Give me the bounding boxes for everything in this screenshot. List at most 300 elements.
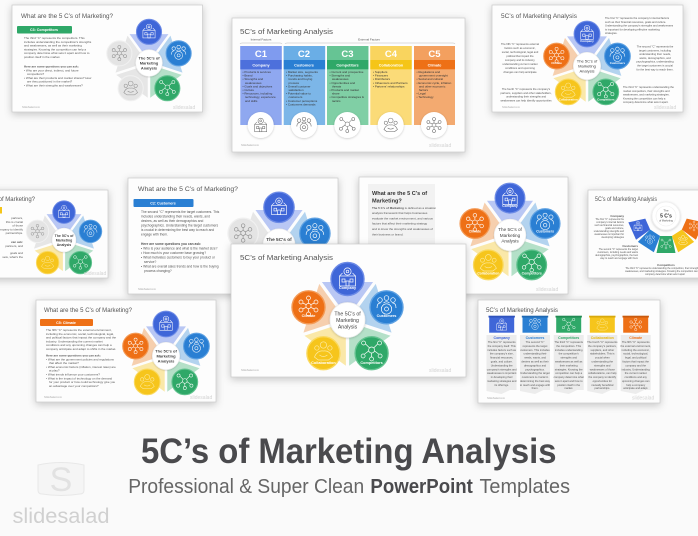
column: collaboration: suppliers, and other <box>590 348 614 352</box>
factor labels <box>240 38 455 44</box>
text: climate: social, technological, legal and <box>502 50 539 54</box>
body text: Here are some questions you can ask: <box>141 242 201 246</box>
text: climate: understanding current market <box>502 62 538 66</box>
column: customers: to reach and engage with <box>520 383 551 387</box>
body text: • What economic factors (inflation, interest rates) are <box>46 365 116 369</box>
text: climate: conditions and upcoming <box>505 66 535 70</box>
text: customers: Customers <box>622 244 638 248</box>
column: customers: demographics and <box>524 363 547 367</box>
body text: • What are their strengths and weaknesses? <box>24 84 83 88</box>
body text: • What are their products and market shares? How <box>24 76 92 80</box>
body text: of those <box>12 224 23 228</box>
text: company: developing strategies <box>601 236 625 239</box>
intro text: factors that affect their marketing strategy <box>372 222 428 226</box>
pentagon diagram <box>107 19 191 101</box>
slide: 5C columns, top centre <box>232 18 465 152</box>
body text: for your product or how could technology give you <box>49 380 116 384</box>
pentagon diagram <box>26 201 102 274</box>
column: competitors: company determine what <box>554 375 584 379</box>
column: climate: Climate <box>629 336 642 340</box>
intro text: and to know the strengths and weaknesses of <box>372 227 433 231</box>
column: collaboration: the company to identify <box>588 375 617 379</box>
slide heading: What are the 5 C’s of Marketing? <box>21 14 114 20</box>
callout: C5 climate: C5: Climate <box>56 321 76 325</box>
footer: slidesalad <box>173 105 195 111</box>
text: company: weaknesses is important for <box>594 233 624 236</box>
footer: SlideSalad.com <box>487 396 505 400</box>
column: collaboration <box>587 316 618 394</box>
column C1 company: • Goals and objectives <box>242 84 273 88</box>
pentagon diagram: Marketing <box>156 354 176 359</box>
slide: competitors focus, top left <box>12 5 202 112</box>
text: climate: factors such as economic, <box>504 46 536 50</box>
column: climate: conditions and any <box>624 375 648 379</box>
column: company: the company's size, <box>490 352 514 356</box>
intro heading: What are the 5 C's of <box>372 191 427 197</box>
column C3 competitors: share <box>332 92 340 96</box>
column: climate <box>621 316 651 394</box>
centre label: The 5C's of <box>334 312 361 318</box>
column: customers: Customers <box>526 336 544 340</box>
fan segments <box>628 215 698 253</box>
body text: • What is the impact of technology on the demand <box>46 376 112 380</box>
slide heading: 5C’s of Marketing Analysis <box>486 308 558 314</box>
column: climate: company and the <box>625 363 647 367</box>
body text: industry. Understanding the current market <box>46 339 103 343</box>
column C1 company: • Brand <box>242 74 253 78</box>
column: competitors: the competitors. This <box>556 344 582 348</box>
footer: slidesalad <box>536 287 558 293</box>
callout: C3 competitors: C3: Competitors <box>30 28 58 32</box>
slide: definition and pentagon <box>359 177 568 294</box>
slide: collaboration focus, left edge <box>0 190 108 278</box>
text: competitors <box>625 263 698 276</box>
column: customers: Understanding the target <box>520 371 550 375</box>
column: competitors: Competitors <box>558 336 579 340</box>
body text: service? <box>144 260 156 264</box>
pentagon diagram: Analysis <box>579 69 595 74</box>
column C4 collaboration: • Influencers and Partners <box>373 81 408 85</box>
column: collaboration: The fourth "C" represents <box>587 340 618 344</box>
text: customers: way to reach and engage with them <box>600 257 638 260</box>
grey intro panel <box>368 184 435 244</box>
centre label: Analysis <box>338 324 358 330</box>
footer <box>241 368 451 374</box>
text: customers: for the best way to reach them. <box>637 67 674 71</box>
column: company: Understanding the <box>491 363 513 367</box>
column: climate: industry. Understanding <box>622 367 650 371</box>
column C4 collaboration <box>370 46 412 138</box>
footer <box>241 143 451 149</box>
body text: • Who are your direct, indirect, and future <box>24 68 79 72</box>
column C4 collaboration: C4 <box>385 49 398 60</box>
text: competitors: weaknesses, and marketing strategies. <box>623 93 670 97</box>
intro heading: Marketing? <box>372 198 402 204</box>
column C1 company: C1 <box>255 49 268 60</box>
node labels: Customers <box>377 314 396 318</box>
column: company: the company itself. This <box>488 344 516 348</box>
column: competitors <box>554 316 584 394</box>
text: climate: political that impact the <box>506 54 534 58</box>
column: customers: them. <box>532 386 539 390</box>
column C1 company: weaknesses <box>245 81 262 85</box>
column: competitors: strengths and <box>561 356 577 360</box>
column: competitors: competition can help a <box>555 371 583 375</box>
column C5 climate: • Social and cultural <box>416 77 443 81</box>
column: climate: anticipate and adapt. <box>623 386 648 390</box>
pentagon diagram: Collaboration <box>477 272 499 276</box>
footer: slidesalad <box>429 368 451 374</box>
text: customers: wants, demographics, and <box>639 56 671 60</box>
intro text: their business or brand. <box>372 232 404 236</box>
slide: fan diagram, right edge <box>588 190 698 278</box>
body text: and political factors that impact the company and the <box>46 336 116 340</box>
centre badge: of Marketing <box>659 220 673 222</box>
pentagon diagram: Marketing <box>500 233 521 238</box>
slide heading: What are the 5 C’s of Marketing? <box>44 308 133 314</box>
slide: five ribbon columns, lower right <box>478 300 660 403</box>
text: collaboration: understanding their strengths and <box>506 95 547 99</box>
column C2 customers: process <box>288 81 300 85</box>
column: climate: factors that impact the <box>622 360 649 364</box>
column C2 customers: satisfaction <box>288 88 304 92</box>
column: collaboration: understanding the <box>592 360 614 364</box>
pentagon diagram <box>228 192 330 287</box>
slide heading: 5C’s of Marketing Analysis <box>240 253 333 262</box>
text: competitors: Competitors <box>657 263 675 267</box>
footer: SlideSalad.com <box>44 395 62 399</box>
text: collaboration: The fourth "C" represents the company's <box>502 87 551 91</box>
column: climate: social, technological, <box>623 352 648 356</box>
text: climate: changes can help anticipate <box>503 70 537 74</box>
column: customers: needs, wants, and <box>524 356 546 360</box>
footer: slidesalad <box>190 395 212 401</box>
body text: company determine what sets it apart and how to <box>24 51 90 55</box>
slide heading: What are the 5 C’s of Marketing? <box>138 187 239 193</box>
column C1 company: • Products & services <box>242 70 271 74</box>
body text: engage with them. <box>141 232 168 236</box>
text: competitors: company determine what sets it apart. <box>623 100 669 104</box>
pentagon diagram: Company <box>580 39 594 43</box>
column: customers: determining the best way <box>520 379 551 383</box>
subtitle: Professional & Super Clean <box>128 476 364 498</box>
column: company: financial resources, <box>490 356 514 360</box>
text: customers: target customers, including <box>639 48 672 52</box>
subtitle: PowerPoint <box>370 476 473 498</box>
column C4 collaboration: Collaboration <box>379 63 404 67</box>
column: climate: legal, and political <box>625 356 647 360</box>
text: customers: The second "C" represents the target <box>599 248 638 251</box>
column C1 company: technology, experience <box>245 95 276 99</box>
text: customers: The second "C" represents the <box>637 44 674 48</box>
body text: and weaknesses, as well as their marketing <box>24 44 82 48</box>
footer: slidesalad <box>632 396 654 402</box>
body text: are they positioned in the market? <box>27 80 73 84</box>
body text: conditions and any upcoming changes can help a <box>46 343 112 347</box>
text: company: is important for developing effective marketing <box>605 27 660 31</box>
column C5 climate: government oversight <box>419 74 448 78</box>
column C3 competitors: • Competitive strategies & <box>330 95 364 99</box>
column C1 company: • Resources, including <box>242 92 273 96</box>
column: customers: psychographics. <box>525 367 545 371</box>
body text: Here are some questions you can ask: <box>24 64 79 68</box>
column C3 competitors <box>327 46 368 138</box>
text: company: Company <box>610 214 624 218</box>
column: customers: customers is crucial in <box>522 375 549 379</box>
column C2 customers: • Overall customer <box>286 84 311 88</box>
pentagon diagram: Marketing <box>140 61 159 66</box>
body text: The fifth "C" represents the external environment, <box>46 328 112 332</box>
callout: C5 climate <box>40 319 93 326</box>
footer: SlideSalad.com <box>241 368 259 372</box>
slide: climate focus, lower left <box>36 300 216 402</box>
text: company: Understanding the company's strengths and weaknesses <box>605 24 674 28</box>
centre badge: The <box>663 208 669 212</box>
main title: 5C’s of Marketing Analysis <box>141 432 556 471</box>
slidesalad logo: slidesalad <box>12 505 110 528</box>
pentagon diagram: Collaboration <box>559 97 578 101</box>
body text: strategies. Knowing the competition can help a <box>24 47 86 51</box>
node labels: Competitors <box>360 361 383 365</box>
body text: includes understanding the competition's strengths <box>24 40 92 44</box>
node labels: Climate <box>302 314 315 318</box>
column C5 climate: factors <box>419 88 429 92</box>
footer: SlideSalad.com <box>241 143 259 147</box>
column C4 collaboration: • Partners' relationships <box>373 84 405 88</box>
body text: • What trends influence your customers? <box>46 372 100 376</box>
intro text: evaluate the market environment, and various <box>372 216 433 220</box>
pentagon diagram <box>292 262 403 370</box>
column C3 competitors: • Opportunities and <box>330 81 355 85</box>
footer: slidesalad <box>429 143 451 149</box>
slide heading: 5C’s of Marketing Analysis <box>501 14 577 20</box>
text: customers <box>595 244 639 260</box>
column C3 competitors: Competitors <box>336 63 359 67</box>
slide heading: 5C’s of Marketing Analysis <box>240 27 333 36</box>
column: climate: upcoming changes can <box>622 379 650 383</box>
pentagon diagram: Analysis <box>269 249 289 255</box>
column C3 competitors: threats <box>332 84 342 88</box>
text: customers: psychographics, understanding <box>636 60 674 64</box>
column C2 customers <box>284 46 325 138</box>
column: collaboration: Collaboration <box>591 336 614 340</box>
body text: company anticipate and adapt to shifts in the market. <box>46 347 116 351</box>
column C1 company: • Culture <box>242 88 254 92</box>
body text: position itself in the market. <box>24 55 61 59</box>
subtitle <box>128 476 570 498</box>
column C1 company <box>240 46 282 138</box>
text: climate: The fifth "C" represents external <box>501 42 539 46</box>
centre badge <box>652 202 680 230</box>
column C1 company: Company <box>252 63 271 67</box>
column: collaboration: strengths and <box>594 363 611 367</box>
text: competitors: company determine what sets it apart <box>645 273 685 276</box>
column: company: goals, and culture. <box>491 360 513 364</box>
body text: partners, <box>11 216 23 220</box>
text: company <box>594 214 625 239</box>
column C4 collaboration: • Distributors <box>373 77 391 81</box>
column C2 customers: trends and buying <box>288 77 313 81</box>
column: collaboration: stakeholders. This is <box>590 352 615 356</box>
body text: psychographics. Understanding the target customers <box>141 224 219 228</box>
text: customers: demographics, psychographics, the best <box>595 254 638 257</box>
column C3 competitors: • Products and market <box>330 88 359 92</box>
body text: The third "C" represents the competitors. This <box>24 36 85 40</box>
pentagon diagram: Competitors <box>597 97 615 101</box>
pentagon diagram: The 5C's of <box>55 234 74 238</box>
slidesalad logo <box>12 461 110 528</box>
body text: goals and <box>10 251 23 255</box>
body text: is crucial in determining the best way to reach and <box>141 228 214 232</box>
intro text: The 5 C's of Marketing is defined as a situation <box>372 206 436 210</box>
subtitle: Templates <box>480 476 570 498</box>
column: collaboration: weaknesses of those <box>590 367 615 371</box>
text: customers: customers, including needs and wants <box>597 251 639 254</box>
pentagon diagram: Analysis <box>57 243 71 247</box>
footer: slidesalad <box>654 105 676 111</box>
column C2 customers: Customers <box>294 63 314 67</box>
slide: main pentagon, front centre <box>231 244 466 377</box>
column C5 climate <box>414 46 455 138</box>
pentagon diagram: Marketing <box>56 238 72 242</box>
pentagon diagram: The 5C's of <box>155 348 177 353</box>
column C5 climate: and other economic <box>419 84 446 88</box>
column: company: includes factors such as <box>487 348 517 352</box>
pentagon diagram: Competitors <box>522 272 542 276</box>
column: competitors: the competition's <box>559 352 579 356</box>
pentagon diagram: Marketing <box>578 64 596 69</box>
factor labels: Internal Factors <box>251 38 272 42</box>
text: company: goals and culture, <box>605 227 624 230</box>
text: company: such as financial resources, <box>594 224 624 227</box>
pentagon diagram: Analysis <box>141 65 158 70</box>
pentagon diagram: The 5C's of <box>138 56 160 61</box>
column C2 customers: • Customer perceptions <box>286 99 318 103</box>
column C4 collaboration: • Suppliers <box>373 70 388 74</box>
node labels <box>302 286 396 365</box>
column: climate: help a company <box>626 383 646 387</box>
pentagon diagram: Analysis <box>501 239 519 244</box>
column: collaboration: partnerships. <box>595 386 610 390</box>
pentagon diagram: Company <box>502 204 518 208</box>
column: company <box>486 316 517 394</box>
text: competitors: Knowing the competition can help a <box>623 96 666 100</box>
column: climate: the current market <box>625 371 647 375</box>
column C3 competitors: • Strengths and <box>330 74 350 78</box>
column: customers <box>520 316 551 394</box>
column C3 competitors: C3 <box>341 49 354 60</box>
column C4 collaboration: • Financers <box>373 74 389 78</box>
column C2 customers: • Potential value to <box>286 92 311 96</box>
column: customers: understanding their <box>523 352 547 356</box>
column C2 customers: • Market size, segments <box>286 70 318 74</box>
pentagon diagram: Customers <box>610 61 625 65</box>
column: company: in developing their <box>491 375 513 379</box>
centre label <box>334 312 361 330</box>
column C5 climate: Climate <box>428 63 441 67</box>
column C5 climate: C5 <box>428 49 441 60</box>
column: climate: the external environment, <box>621 344 651 348</box>
body text: sets, what's the <box>2 255 23 259</box>
body text: desires, as well as their demographics and <box>141 219 203 223</box>
body text: an advantage over your competitors? <box>49 384 99 388</box>
text: collaboration: weaknesses can help identify opportunities <box>500 98 552 102</box>
centre badge: 5 C's <box>660 214 672 220</box>
pentagon diagram <box>544 21 630 105</box>
text: customers: understanding their needs, <box>639 52 671 56</box>
footer: slidesalad <box>84 271 106 277</box>
body text: including the economic, social, technological, legal, <box>46 332 114 336</box>
text: climate: company and its industry, <box>505 58 535 62</box>
column: competitors: their marketing <box>560 363 578 367</box>
callout: C2 customers: C2: Customers <box>150 201 176 205</box>
column: competitors: The third "C" represents <box>554 340 584 344</box>
footer: SlideSalad.com <box>22 105 40 109</box>
column: collaboration: the company's partners, <box>588 344 617 348</box>
column: climate: The fifth "C" represents <box>622 340 650 344</box>
column C5 climate: • Technology <box>416 95 434 99</box>
callout: C2 customers <box>134 199 194 207</box>
column: collaboration: collaborations, can help <box>588 371 617 375</box>
body text: this is crucial <box>6 220 23 224</box>
body text: Here are some questions you can ask: <box>46 354 101 358</box>
footer <box>502 105 676 111</box>
text: company: The first "C" represents the company's internal factors <box>605 16 670 20</box>
column: company: company's strengths and <box>487 367 517 371</box>
body text: can ask: <box>11 240 23 244</box>
footer <box>487 396 654 402</box>
column C5 climate: • Economic cycle, inflation <box>416 81 452 85</box>
body text: • What are overall sales trends and how is the buying <box>141 264 219 268</box>
pentagon diagram: The 5C's of <box>266 237 292 243</box>
slide heading: 5C’s of Marketing Analysis <box>595 197 657 203</box>
slide: labelled pentagon with descriptions, top right <box>492 5 683 112</box>
column C3 competitors: weaknesses <box>332 77 349 81</box>
column: competitors: strategies. Knowing the <box>555 367 583 371</box>
slidesalad logo: S <box>50 461 72 499</box>
slide: customers focus <box>128 178 338 294</box>
pentagon diagram: Analysis <box>158 359 175 364</box>
body text: • Who is your audience and what is the market size? <box>141 246 218 250</box>
footer: SlideSalad.com <box>502 105 520 109</box>
pentagon diagram: Customers <box>536 229 554 233</box>
column: competitors: weaknesses as well as <box>555 360 583 364</box>
pentagon diagram <box>460 183 560 280</box>
intro text: analysis framework that helps businesses <box>372 211 428 215</box>
column C3 competitors: • Current and prospective <box>330 70 364 74</box>
text: company: strategies. <box>605 31 618 35</box>
column: company: marketing strategies and <box>487 379 517 383</box>
footer <box>22 105 195 111</box>
centre label: Marketing <box>336 318 359 324</box>
column: company: The first "C" represents <box>488 340 516 344</box>
factor labels: External Factors <box>358 38 380 42</box>
column C3 competitors: tactics <box>332 99 341 103</box>
body text: partners, and <box>5 244 23 248</box>
callout: C4 collaboration <box>0 207 2 214</box>
column C1 company: and skills <box>245 99 258 103</box>
text: customers: the target customers is crucial <box>637 64 673 68</box>
column: competitors: market. <box>564 386 573 390</box>
column C2 customers: • Customers demands <box>286 102 316 106</box>
column C2 customers: • Purchasing habits, <box>286 74 313 78</box>
column C5 climate: • Legal <box>416 92 426 96</box>
pentagon diagram: The 5C's of <box>577 58 598 63</box>
column C2 customers: customers <box>288 95 303 99</box>
body text: • How much is your customer base growing? <box>141 251 206 255</box>
pentagon diagram: Climate <box>469 229 481 233</box>
text: competitors: The third "C" represents understanding the <box>623 85 674 89</box>
